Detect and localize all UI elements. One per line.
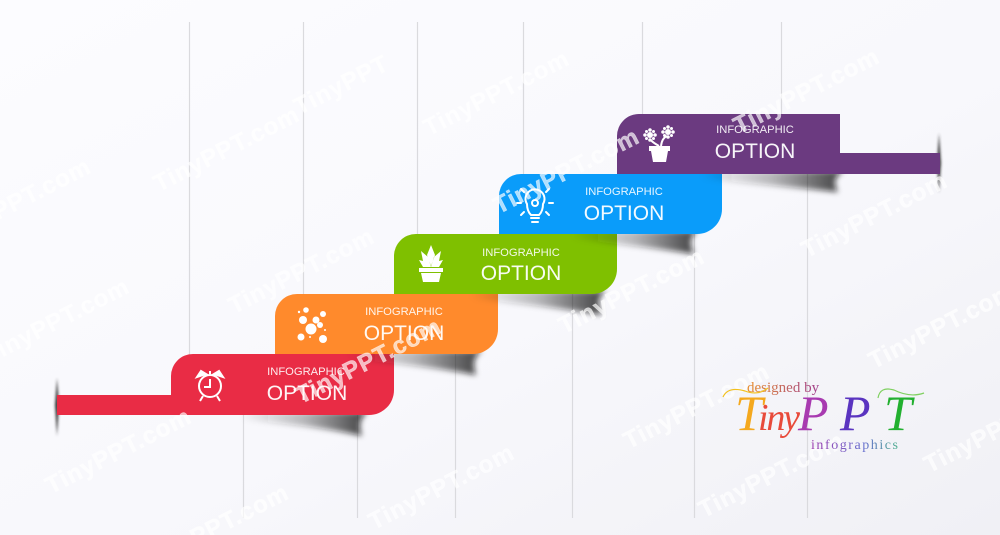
label: step 5: OPTION: [715, 140, 795, 163]
step 2: orange tab: [275, 294, 498, 354]
watermarks: TinyPPT.com: [489, 123, 644, 220]
step 1: red ribbon: [57, 354, 394, 415]
label: step 5: [715, 124, 795, 163]
logo: TinyPPT wordmark: iny: [758, 397, 800, 439]
ribbon end shadows: [55, 133, 941, 436]
label: step 3: OPTION: [481, 262, 561, 285]
step 3: green tab: [394, 234, 617, 294]
watermarks: TinyPPT.com: [364, 439, 519, 535]
label: step 2: OPTION: [364, 322, 444, 345]
step 4: blue tab: [499, 174, 722, 234]
icon: flower pot: [643, 125, 675, 162]
icon: light bulb with gear: [517, 189, 553, 222]
watermarks: TinyPPT: [290, 50, 393, 121]
logo: TinyPPT wordmark: P: [839, 385, 871, 441]
logo: TinyPPT wordmark: T: [884, 385, 915, 441]
watermarks: TinyPPT.com: [554, 243, 709, 340]
step 5: purple ribbon: [617, 114, 940, 174]
logo: [723, 380, 924, 453]
label: step 4: OPTION: [584, 202, 664, 225]
label: step 1: INFOGRAPHIC: [267, 366, 345, 378]
watermarks: TinyPPT.com: [419, 45, 574, 142]
watermarks: TinyPPT.com: [41, 403, 196, 500]
shadow under step 3: [470, 291, 606, 315]
watermarks: TinyPPT.com: [149, 101, 304, 198]
shadow under step 1: [240, 412, 368, 436]
label: step 2: INFOGRAPHIC: [365, 306, 443, 318]
label: step 5: INFOGRAPHIC: [716, 124, 794, 136]
logo: infographics: infographics: [811, 438, 898, 453]
label: step 4: [584, 186, 664, 225]
icon: bubbles: [298, 307, 327, 343]
logo: designed by: designed by: [747, 380, 820, 396]
shadow under step 5: [700, 171, 844, 192]
shadow under step 2: [345, 351, 482, 375]
watermarks: TinyPPT.com: [797, 167, 952, 264]
label: step 2: [364, 306, 444, 345]
label: step 3: [481, 247, 561, 285]
watermarks: TinyPPT.com: [694, 427, 849, 524]
label: step 1: OPTION: [267, 382, 347, 405]
watermarks: TinyPPT.com: [729, 43, 884, 140]
watermarks: TinyPPT.com: [224, 223, 379, 320]
logo: TinyPPT wordmark: P: [797, 385, 829, 441]
watermarks: TinyPPT.com: [291, 313, 446, 410]
label: step 4: INFOGRAPHIC: [585, 186, 663, 198]
label: step 1: [267, 366, 347, 405]
shadow under step 4: [570, 231, 698, 254]
logo: TinyPPT wordmark: [735, 385, 915, 441]
logo: TinyPPT wordmark: T: [735, 385, 766, 441]
label: step 3: INFOGRAPHIC: [482, 247, 560, 259]
watermarks: TinyPPT.com: [619, 358, 774, 455]
icon: succulent in pot: [419, 245, 443, 282]
vertical grid lines: [190, 22, 808, 518]
icon: alarm clock: [197, 371, 223, 401]
